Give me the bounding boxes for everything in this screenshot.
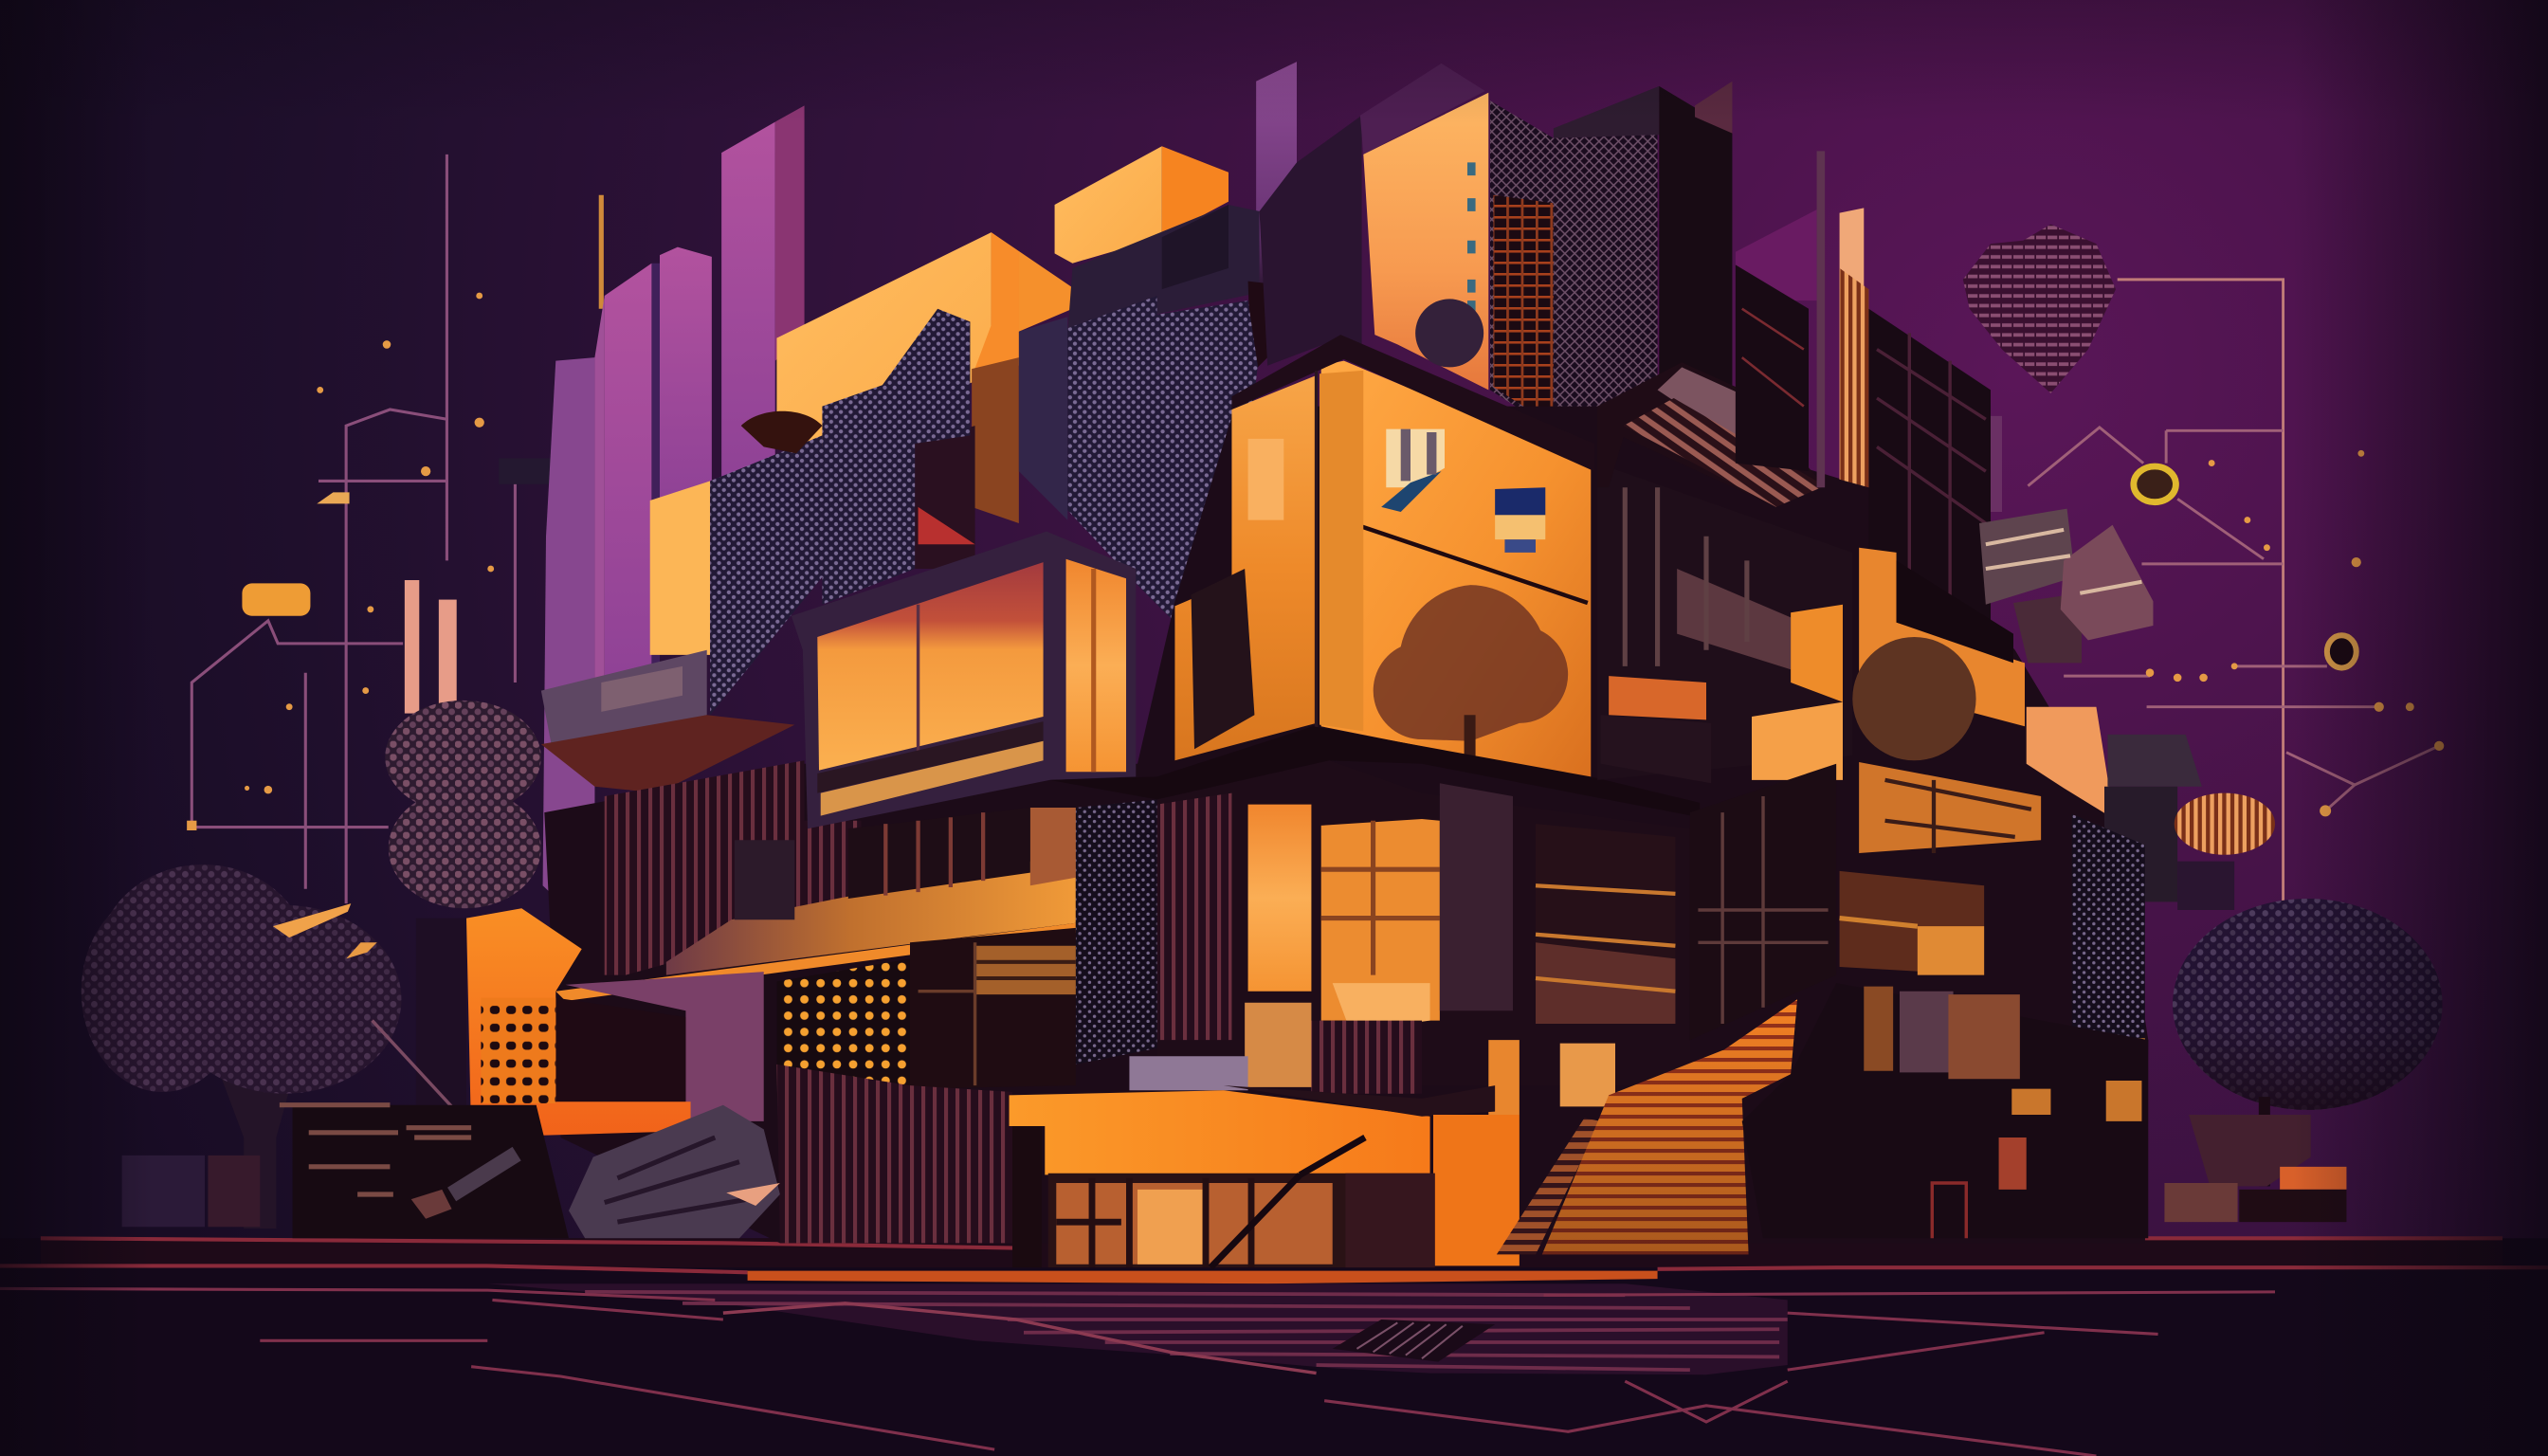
right circuit lines and dots (2028, 280, 2444, 901)
rock pile (569, 1105, 780, 1238)
dome lamp (741, 411, 822, 453)
floating boxes (1979, 509, 2153, 663)
main orange facade (1174, 335, 1594, 780)
textured heart (1963, 225, 2116, 393)
ground (0, 1238, 2548, 1456)
yellow orange blocks (650, 146, 1228, 655)
right orange windows (1840, 548, 2041, 975)
right peach block (2027, 707, 2114, 819)
icon: floating yellow pill (242, 583, 310, 616)
large left tree (82, 864, 401, 1228)
dark opening (555, 998, 685, 1101)
textured central pillar (1076, 799, 1157, 1065)
icon: orange floating orb (2327, 635, 2357, 668)
orange balcony band (555, 808, 1076, 1001)
small background boxes (122, 1156, 260, 1227)
dark upper blocks (1067, 64, 1732, 410)
striped left lower wall (605, 760, 862, 975)
tall orange tower front (1363, 93, 1488, 390)
central lower windows (1129, 760, 1836, 1115)
left balcony (541, 650, 794, 793)
right furniture (2164, 1115, 2346, 1222)
left circuit lines and dots (187, 155, 601, 903)
right lower dark terrace (1742, 983, 2148, 1238)
mid right awning and facade (1597, 362, 1852, 783)
left orange block (466, 908, 691, 1138)
right dark tower (1736, 151, 2002, 642)
right inner tree (1852, 637, 1976, 760)
textured right column (2072, 814, 2145, 1065)
pale purple support (566, 972, 764, 1121)
brown door section (910, 928, 1076, 1089)
facade tree (1374, 585, 1568, 771)
textured tower faces (1490, 100, 1658, 430)
facade lower slab (1049, 726, 1700, 817)
purple towers (543, 62, 1297, 935)
striped lower wall (776, 1065, 1012, 1243)
pink light columns (405, 580, 457, 714)
bottom orange entrance (1010, 1085, 1520, 1267)
dotted window (776, 958, 910, 1087)
dark signal pillar (499, 458, 555, 484)
small tree on tower (1415, 299, 1483, 367)
street lamp (273, 903, 471, 1128)
upper left trees (385, 701, 541, 908)
main building body (544, 407, 2148, 1243)
icon: yellow ring (2134, 466, 2175, 502)
right side block (2104, 735, 2275, 910)
right tree (2173, 899, 2443, 1186)
window box (792, 532, 1136, 828)
textured panels (710, 296, 1258, 715)
grand staircase (1497, 999, 1797, 1254)
dark rubble (280, 1105, 569, 1238)
left dark columns (416, 919, 466, 1110)
